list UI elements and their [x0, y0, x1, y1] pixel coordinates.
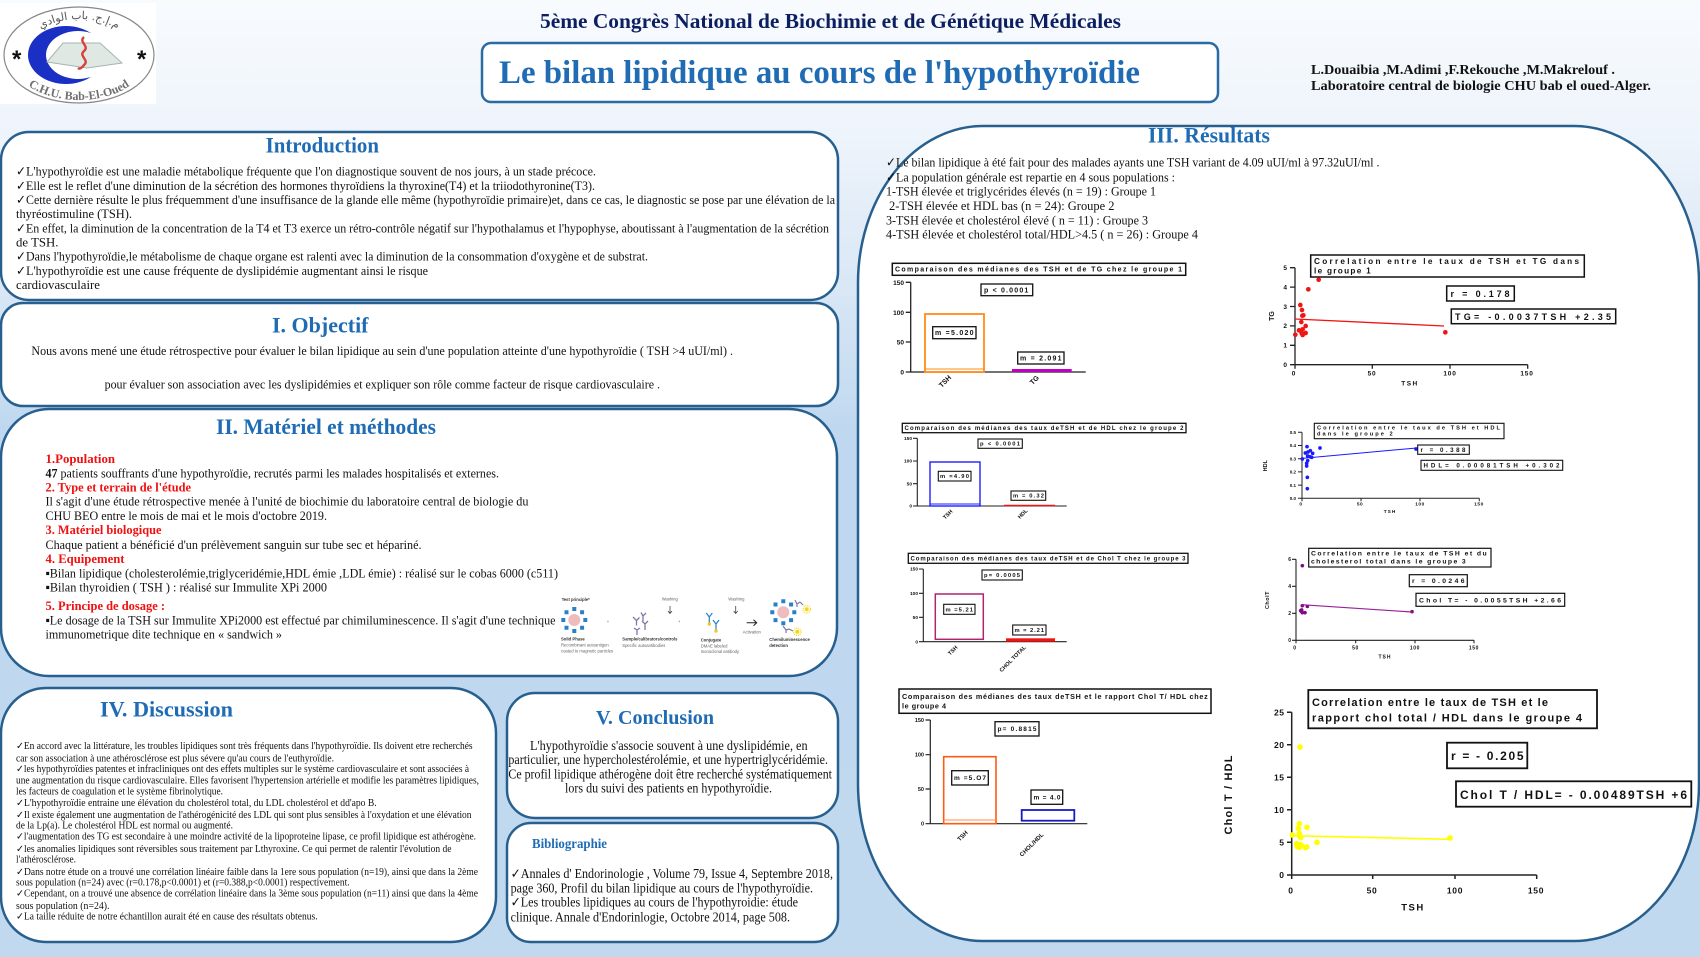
chart title [892, 263, 1186, 275]
diagram: test principle: Specific autoantibodies [622, 643, 665, 648]
scatter plot: groupe 2 TSH vs HDL: 150 [1474, 502, 1484, 508]
scatter plot: groupe 3 TSH vs Chol T: CholT [1265, 591, 1271, 609]
bar chart: groupe 2 TSH vs HDL: 50 [907, 481, 912, 487]
scatter plot: groupe 3 TSH vs Chol T: 2 [1288, 611, 1291, 617]
panel: discussion [1, 688, 496, 942]
bar chart: groupe 1 TSH vs TG: 0 [900, 370, 904, 376]
text block: conclusion: particulier, une hypercholestérolémie, et une hypertriglycéridémie. [508, 752, 828, 767]
diagram: test principle: + [607, 619, 610, 624]
bar chart: groupe 4 TSH vs Chol T/HDL: m = 4.0 [1034, 794, 1061, 801]
text block: methods: 3. Matériel biologique [46, 522, 162, 537]
diagram: test principle: Recombinant autoantigen [561, 642, 609, 648]
text block: introduction [16, 164, 835, 292]
bar chart: groupe 1 TSH vs TG: p < 0.0001 [984, 288, 1028, 294]
text block: methods [46, 451, 558, 642]
scatter plot: groupe 1 TSH vs TG: 50 [1368, 370, 1376, 377]
scatter plot: groupe 1 TSH vs TG: 5 [1283, 265, 1287, 272]
scatter plot: groupe 3 TSH vs Chol T: TSH [1378, 654, 1392, 660]
text block: conclusion [508, 738, 832, 795]
chart title: Comparaison des médianes des taux deTSH et de HDL chez le groupe 2 [904, 426, 1184, 432]
scatter plot: groupe 1 TSH vs TG: 0 [1292, 370, 1296, 377]
bar chart: groupe 3 TSH vs Chol T: 150 [910, 567, 918, 573]
heading: objectif: I. Objectif [272, 313, 369, 338]
bar chart: groupe 3 TSH vs Chol T: CHOL TOTAL [999, 644, 1028, 674]
chart title: Comparaison des médianes des TSH et de TG chez le groupe 1 [895, 267, 1182, 274]
text block: results summary: 3-TSH élevée et cholestérol élevé ( n = 11) : Groupe 3 [886, 212, 1148, 227]
bar chart: groupe 1 TSH vs TG: 100 [893, 310, 904, 317]
diagram: test principle: DMAE labeled [701, 643, 728, 648]
text block: introduction: thyréostimuline (TSH). [16, 206, 132, 221]
heading: matériel et méthodes: II. Matériel et méthodes [216, 414, 436, 439]
scatter plot: groupe 1 TSH vs TG: TG= -0.0037TSH +2.35 [1455, 312, 1611, 322]
bar chart: groupe 3 TSH vs Chol T: m = 2.21 [1014, 628, 1045, 634]
logo: CHU Bab-El-Oued: * [12, 46, 22, 73]
text block: methods: 2. Type et terrain de l'étude [46, 480, 191, 495]
text block: discussion: ✓En accord avec la littérature, les troubles lipidiques sont très fréquents dans l'hypothyroïdie. Ils doivent etre recherchés [16, 741, 473, 752]
scatter plot: groupe 3 TSH vs Chol T: 0 [1288, 638, 1291, 644]
scatter plot: groupe 1 TSH vs TG: 2 [1283, 323, 1287, 330]
scatter plot: groupe 4 TSH vs Chol T/HDL: TSH [1401, 903, 1425, 914]
text block: conclusion: Ce profil lipidique athérogène doit être recherché systématiquement [508, 766, 832, 781]
text block: methods: immunometrique dite technique en « sandwich » [46, 627, 282, 642]
text block: methods: Chaque patient a bénéficié d'un prélèvement sanguin sur tube sec et hépariné. [46, 537, 422, 552]
scatter plot: groupe 1 TSH vs TG: 3 [1283, 304, 1287, 311]
bar chart: groupe 3 TSH vs Chol T: p= 0.0005 [984, 573, 1021, 579]
scatter plot: groupe 2 TSH vs HDL: 0.0 [1290, 496, 1296, 501]
bar chart: groupe 2 TSH vs HDL [902, 423, 1186, 521]
bar chart: groupe 1 TSH vs TG: 150 [893, 280, 904, 287]
scatter plot: groupe 3 TSH vs Chol T: r = 0.0246 [1412, 578, 1465, 585]
scatter plot: groupe 4 TSH vs Chol T/HDL: r = - 0.205 [1451, 749, 1524, 763]
text block: methods: 47 patients souffrants d'une hypothyroïdie, recrutés parmi les malades hospitalisés et externes. [46, 466, 499, 481]
text block: discussion: ✓les hypothyroïdies patentes et infracliniques ont des effets multiples sur le système cardiovasculaire et sont associées à [16, 764, 470, 775]
scatter plot: groupe 3 TSH vs Chol T: 6 [1288, 557, 1291, 563]
text block: results summary: 2-TSH élevée et HDL bas (n = 24): Groupe 2 [889, 198, 1114, 213]
chart title [1311, 255, 1584, 277]
text block: discussion: ✓les anomalies lipidiques sont réversibles sous traitement par Lthyroxine. Ce qui permet de ralentir l'évolution de [16, 844, 452, 855]
panel: matériel et méthodes [1, 409, 837, 676]
bar chart: groupe 4 TSH vs Chol T/HDL [899, 689, 1211, 858]
bar chart: groupe 4 TSH vs Chol T/HDL: 50 [918, 787, 924, 793]
scatter plot: groupe 4 TSH vs Chol T/HDL: 100 [1447, 885, 1463, 895]
bar chart: groupe 1 TSH vs TG: m = 2.091 [1020, 356, 1062, 362]
scatter plot: groupe 2 TSH vs HDL: 50 [1357, 502, 1363, 508]
bar chart: groupe 2 TSH vs HDL: 100 [904, 459, 912, 465]
chart title [1309, 548, 1491, 567]
logo: CHU Bab-El-Oued: C.H.U. Bab-El-Oued [30, 79, 130, 100]
text block: discussion: sous population (n=24). [16, 901, 110, 912]
text block: results summary [886, 155, 1380, 241]
text block: conclusion: lors du suivi des patients en hypothyroïdie. [565, 780, 772, 795]
panel: bibliographie [507, 823, 838, 942]
chart title: le groupe 4 [902, 701, 946, 710]
scatter plot: groupe 3 TSH vs Chol T [1265, 548, 1565, 660]
text block: methods: ▪Bilan lipidique (cholesterolémie,triglyceridémie,HDL émie ,LDL émie) : réalisé sur le cobas 6000 (c511) [46, 566, 558, 581]
scatter plot: groupe 2 TSH vs HDL: 100 [1415, 502, 1425, 508]
bar chart: groupe 2 TSH vs HDL: m =4.90 [940, 474, 969, 480]
chart title [1314, 423, 1504, 439]
scatter plot: groupe 4 TSH vs Chol T/HDL: 0 [1279, 870, 1284, 880]
text block: discussion: ✓Cependant, on a trouvé une absence de corrélation linéaire dans la 3ème sous population (n=11) ainsi que dans la 4ème [16, 889, 479, 900]
bar chart: groupe 3 TSH vs Chol T: 0 [915, 639, 918, 645]
heading: conclusion: V. Conclusion [596, 707, 714, 729]
text block: methods: ▪Bilan thyroidien ( TSH ) : réalisé sur Immulite XPi 2000 [46, 580, 327, 595]
text block: results summary: ✓Le bilan lipidique à été fait pour des malades ayants une TSH variant de 4.09 uUI/ml à 97.32uUI/ml . [886, 155, 1380, 170]
scatter plot: groupe 4 TSH vs Chol T/HDL: 150 [1528, 885, 1544, 895]
heading: bibliographie: Bibliographie [532, 836, 607, 851]
scatter plot: groupe 2 TSH vs HDL: 0.1 [1290, 483, 1296, 488]
authors and affiliation: Laboratoire central de biologie CHU bab el oued-Alger. [1311, 79, 1651, 94]
diagram: test principle [561, 597, 810, 654]
bar chart: groupe 2 TSH vs HDL: 0 [909, 504, 912, 510]
text block: introduction: ✓Elle est le reflet d'une diminution de la sécrétion des hormones thyroïdiens la thyroxine(T4) et la triiodothyronine(T3). [16, 178, 595, 193]
bar chart: groupe 2 TSH vs HDL: HDL [1017, 508, 1030, 520]
chart title: Comparaison des médianes des taux deTSH et de Chol T chez le groupe 3 [910, 556, 1186, 562]
bar chart: groupe 1 TSH vs TG: 50 [897, 340, 904, 346]
arrow: activation [747, 620, 757, 626]
authors and affiliation [1311, 63, 1651, 94]
scatter plot: groupe 1 TSH vs TG [1269, 255, 1616, 388]
diagram: test principle: Sample/calibrators/controls [622, 636, 678, 641]
title box [482, 43, 1218, 102]
scatter plot: groupe 3 TSH vs Chol T: Chol T= - 0.0055TSH +2.66 [1419, 598, 1561, 604]
text block: results summary: 4-TSH élevée et cholestérol total/HDL>4.5 ( n = 26) : Groupe 4 [886, 226, 1198, 241]
text block: discussion: ✓L'hypothyroïdie entraine une élévation du cholestérol total, du LDL cholestérol et dd'apo B. [16, 798, 377, 809]
text block: objectif [31, 343, 733, 392]
diagram: test principle: + [678, 619, 681, 624]
scatter plot: groupe 2 TSH vs HDL: 0 [1299, 502, 1303, 508]
heading: discussion: IV. Discussion [100, 697, 233, 722]
scatter plot: groupe 3 TSH vs Chol T: 100 [1410, 646, 1420, 652]
bar chart: groupe 4 TSH vs Chol T/HDL: 150 [915, 718, 924, 724]
bar chart: groupe 2 TSH vs HDL: p < 0.0001 [980, 442, 1021, 448]
text block: methods: ▪Le dosage de la TSH sur Immulite XPi2000 est effectué par chimiluminescence. Il s'agit d'une technique [46, 613, 556, 628]
text block: introduction: ✓En effet, la diminution de la concentration de la T4 et T3 exerce un rétro-contrôle négatif sur l'hypothalamus et l'hypophyse, aboutissant à l'augmentation de la sécrétion [16, 221, 829, 236]
diagram: test principle: Washing [728, 597, 745, 602]
text block: references: ✓Les troubles lipidiques au cours de l'hypothyroidie: étude [511, 895, 798, 910]
bar chart: groupe 4 TSH vs Chol T/HDL: 100 [915, 753, 924, 759]
scatter plot: groupe 1 TSH vs TG: 1 [1283, 343, 1287, 350]
text block: discussion: l'athérosclérose. [16, 855, 76, 866]
diagram: test principle: Conjugate [701, 637, 722, 642]
text block: methods: CHU BEO entre le mois de mai et le mois d'octobre 2019. [46, 508, 327, 523]
authors and affiliation: L.Douaibia ,M.Adimi ,F.Rekouche ,M.Makrelouf . [1311, 63, 1615, 78]
scatter plot: groupe 4 TSH vs Chol T/HDL: 50 [1367, 885, 1377, 895]
diagram: test principle: Activation [743, 629, 762, 634]
scatter plot: groupe 4 TSH vs Chol T/HDL: 0 [1288, 885, 1294, 895]
scatter plot: groupe 4 TSH vs Chol T/HDL: Chol T / HDL= - 0.00489TSH +6 [1460, 788, 1687, 802]
scatter plot: groupe 1 TSH vs TG: 150 [1520, 370, 1534, 377]
bar chart: groupe 1 TSH vs TG: TSH [938, 375, 953, 389]
text block: introduction: de TSH. [16, 235, 58, 250]
chart title: dans le groupe 2 [1317, 432, 1393, 438]
bar chart: groupe 4 TSH vs Chol T/HDL: p= 0.8815 [998, 726, 1037, 733]
diagram: test principle: detection [769, 643, 788, 648]
scatter plot: groupe 4 TSH vs Chol T/HDL: 15 [1274, 772, 1284, 782]
bar chart: groupe 1 TSH vs TG: TG [1029, 374, 1041, 387]
chart title: cholesterol total dans le groupe 3 [1311, 558, 1466, 565]
scatter plot: groupe 2 TSH vs HDL: HDL= 0.00081TSH +0.302 [1424, 462, 1560, 470]
text block: discussion: de la Lp(a). Le cholestérol HDL est normal ou augmenté. [16, 821, 233, 832]
chart title [908, 553, 1188, 563]
title: Le bilan lipidique au cours de l'hypothyroïdie [499, 55, 1140, 91]
text block: conclusion: L'hypothyroïdie s'associe souvent à une dyslipidémie, en [530, 738, 808, 753]
scatter plot: groupe 4 TSH vs Chol T/HDL: 5 [1279, 838, 1284, 848]
scatter plot: groupe 3 TSH vs Chol T: 50 [1352, 646, 1359, 652]
scatter plot: groupe 1 TSH vs TG: 100 [1443, 370, 1457, 377]
scatter plot: groupe 2 TSH vs HDL: r = 0.388 [1420, 447, 1466, 454]
scatter plot: groupe 2 TSH vs HDL: TSH [1384, 509, 1396, 515]
logo: CHU Bab-El-Oued: م.إ.ج. باب الوادي [40, 10, 118, 30]
bar chart: groupe 1 TSH vs TG: m =5.020 [935, 330, 974, 337]
diagram: test principle: Washing [662, 597, 679, 602]
bar chart: groupe 4 TSH vs Chol T/HDL: m =5.O7 [954, 775, 986, 782]
text block: references: page 360, Profil du bilan lipidique au cours de l'hypothyroïdie. [511, 880, 813, 895]
panel: objectif [1, 303, 838, 406]
bar chart: groupe 4 TSH vs Chol T/HDL: 0 [921, 822, 924, 828]
heading: résultats: III. Résultats [1148, 123, 1270, 148]
text block: discussion: une augmentation du risque cardiovasculaire. Elles favorisent l'hypertension artérielle et modifie les paramètres lipidiques, [16, 775, 479, 786]
chart title [902, 423, 1186, 433]
bar chart: groupe 2 TSH vs HDL: 150 [904, 436, 912, 442]
text block: methods: 1.Population [46, 451, 116, 466]
diagram: test principle: Test principle* [562, 597, 590, 602]
icon: conjugate [706, 613, 719, 633]
panel: résultats [858, 123, 1699, 941]
diagram: test principle: coated to magnetic particles [561, 648, 613, 653]
text block: introduction: ✓Dans l'hypothyroïdie,le métabolisme de chaque organe est ralenti avec la diminution de la consommation d'oxygène et de substrat. [16, 249, 648, 264]
bar chart: groupe 2 TSH vs HDL: m = 0.32 [1013, 494, 1044, 500]
bar chart: groupe 3 TSH vs Chol T: 50 [913, 615, 918, 621]
scatter plot: groupe 1 TSH vs TG: TG [1269, 311, 1276, 321]
scatter plot: groupe 2 TSH vs HDL: 0.5 [1290, 430, 1296, 435]
congress heading: 5ème Congrès National de Biochimie et de Génétique Médicales [540, 9, 1121, 33]
text block: references [511, 866, 833, 924]
bar chart: groupe 1 TSH vs TG [892, 263, 1186, 389]
diagram: test principle: Solid Phase [561, 637, 585, 642]
chart title: le groupe 1 [1314, 266, 1371, 275]
chart title [899, 689, 1211, 713]
bar chart: groupe 3 TSH vs Chol T: 100 [910, 591, 918, 597]
text block: introduction: ✓Cette dernière résulte le plus fréquemment d'une insuffisance de la glande elle même (hypothyroïdie primaire)et, dans ce cas, le diagnostic se pose par une élévation de la [16, 192, 835, 207]
chart title: Correlation entre le taux de TSH et HDL [1317, 426, 1501, 432]
text block: introduction: cardiovasculaire [16, 277, 100, 292]
text block: discussion [16, 741, 479, 923]
panel: conclusion [507, 693, 838, 818]
text block: discussion: sous population (n=24) avec (r=0.178,p<0.0001) et (r=0.388,p<0.0001) respectivement. [16, 878, 350, 889]
panel: introduction [1, 132, 838, 300]
chart title: rapport chol total / HDL dans le groupe 4 [1312, 712, 1583, 724]
text block: discussion: car son association à une athérosclérose est plus sévere qu'au cours de l'euthyroïdie. [16, 753, 334, 764]
text block: discussion: ✓l'augmentation des TG est secondaire à une moindre activité de la lipoproteine lipase, ce profil lipidique est athérogène. [16, 832, 476, 843]
text block: introduction: ✓L'hypothyroïdie est une cause fréquente de dyslipidémie augmentant ainsi le risque [16, 263, 428, 278]
text block: discussion: ✓Dans notre étude on a trouvé une corrélation linéaire faible dans la 1ere sous population (n=19), ainsi que dans la 2ème [16, 867, 479, 878]
bar chart: groupe 3 TSH vs Chol T: m =5.21 [946, 608, 974, 614]
chart title: Correlation entre le taux de TSH et le [1312, 697, 1548, 709]
text block: objectif: Nous avons mené une étude rétrospective pour évaluer le bilan lipidique au sein d'une population atteinte d'une hypothyroïdie ( TSH >4 uUI/ml) . [31, 343, 733, 358]
text block: discussion: ✓Il existe également une augmentation de l'athérogénicité des LDL qui sont plus sensibles à l'oxydation et une élévation [16, 810, 472, 821]
icon: autoantibodies [633, 612, 648, 635]
scatter plot: groupe 2 TSH vs HDL [1263, 423, 1563, 515]
scatter plot: groupe 1 TSH vs TG: TSH [1401, 381, 1419, 388]
text block: references: ✓Annales d' Endorinologie , Volume 79, Issue 4, Septembre 2018, [511, 866, 833, 881]
diagram: test principle: Chemiluminescence [769, 637, 810, 642]
text block: introduction: ✓L'hypothyroïdie est une maladie métabolique fréquente que l'on diagnostique souvent de nos jours, à un stade précoce. [16, 164, 596, 179]
text block: objectif: pour évaluer son association avec les dyslipidémies et expliquer son rôle comme facteur de risque cardiovasculaire . [105, 377, 660, 392]
diagram: test principle: monoclonal antibody [701, 649, 740, 654]
text block: methods: 5. Principe de dosage : [46, 598, 165, 613]
bar chart: groupe 4 TSH vs Chol T/HDL: TSH [957, 830, 970, 843]
scatter plot: groupe 4 TSH vs Chol T/HDL: 25 [1274, 708, 1284, 718]
scatter plot: groupe 1 TSH vs TG: r = 0.178 [1450, 289, 1510, 299]
logo: CHU Bab-El-Oued: * [137, 46, 147, 73]
scatter plot: groupe 4 TSH vs Chol T/HDL: 10 [1274, 805, 1284, 815]
text block: methods: Il s'agit d'une étude rétrospective menée à l'unité de biochimie du laboratoire central de biologie du [46, 494, 529, 509]
chart title: Correlation entre le taux de TSH et TG dans [1314, 257, 1579, 266]
icon: chemiluminescence [770, 599, 796, 625]
text block: discussion: les facteurs de coagulation et le système fibrinolytique. [16, 787, 223, 798]
scatter plot: groupe 1 TSH vs TG: 0 [1283, 362, 1287, 369]
text block: results summary: 1-TSH élevée et triglycérides élevés (n = 19) : Groupe 1 [886, 184, 1156, 199]
text block: references: clinique. Annale d'Endorinlogie, Octobre 2014, page 508. [511, 909, 790, 924]
icon: solid phase [561, 607, 587, 633]
logo: CHU Bab-El-Oued [0, 6, 156, 104]
text block: results summary: ✓La population générale est repartie en 4 sous populations : [886, 169, 1175, 184]
scatter plot: groupe 3 TSH vs Chol T: 150 [1469, 646, 1479, 652]
text block: discussion: ✓La taille réduite de notre échantillon aurait été en cause des résultats obtenus. [16, 912, 318, 923]
bar chart: groupe 2 TSH vs HDL: TSH [942, 509, 954, 521]
chart title: Comparaison des médianes des taux deTSH et le rapport Chol T/ HDL chez [902, 692, 1208, 701]
scatter plot: groupe 4 TSH vs Chol T/HDL: 20 [1274, 740, 1284, 750]
scatter plot: groupe 2 TSH vs HDL: 0.4 [1290, 443, 1296, 448]
scatter plot: groupe 3 TSH vs Chol T: 0 [1293, 646, 1297, 652]
scatter plot: groupe 2 TSH vs HDL: 0.3 [1290, 456, 1296, 461]
scatter plot: groupe 1 TSH vs TG: 4 [1283, 284, 1287, 291]
scatter plot: groupe 4 TSH vs Chol T/HDL: Chol T / HDL [1223, 755, 1235, 834]
scatter plot: groupe 2 TSH vs HDL: HDL [1263, 459, 1269, 471]
text block: methods: 4. Equipement [46, 551, 125, 566]
chart title: Correlation entre le taux de TSH et du [1311, 551, 1487, 558]
bar chart: groupe 3 TSH vs Chol T [908, 553, 1188, 674]
scatter plot: groupe 4 TSH vs Chol T/HDL [1223, 690, 1691, 914]
bar chart: groupe 4 TSH vs Chol T/HDL: CHOL/HDL [1019, 832, 1046, 858]
chart title [1308, 690, 1597, 728]
scatter plot: groupe 2 TSH vs HDL: 0.2 [1290, 470, 1296, 475]
scatter plot: groupe 3 TSH vs Chol T: 4 [1288, 584, 1291, 590]
heading: introduction: Introduction [266, 133, 379, 158]
bar chart: groupe 3 TSH vs Chol T: TSH [947, 645, 959, 657]
